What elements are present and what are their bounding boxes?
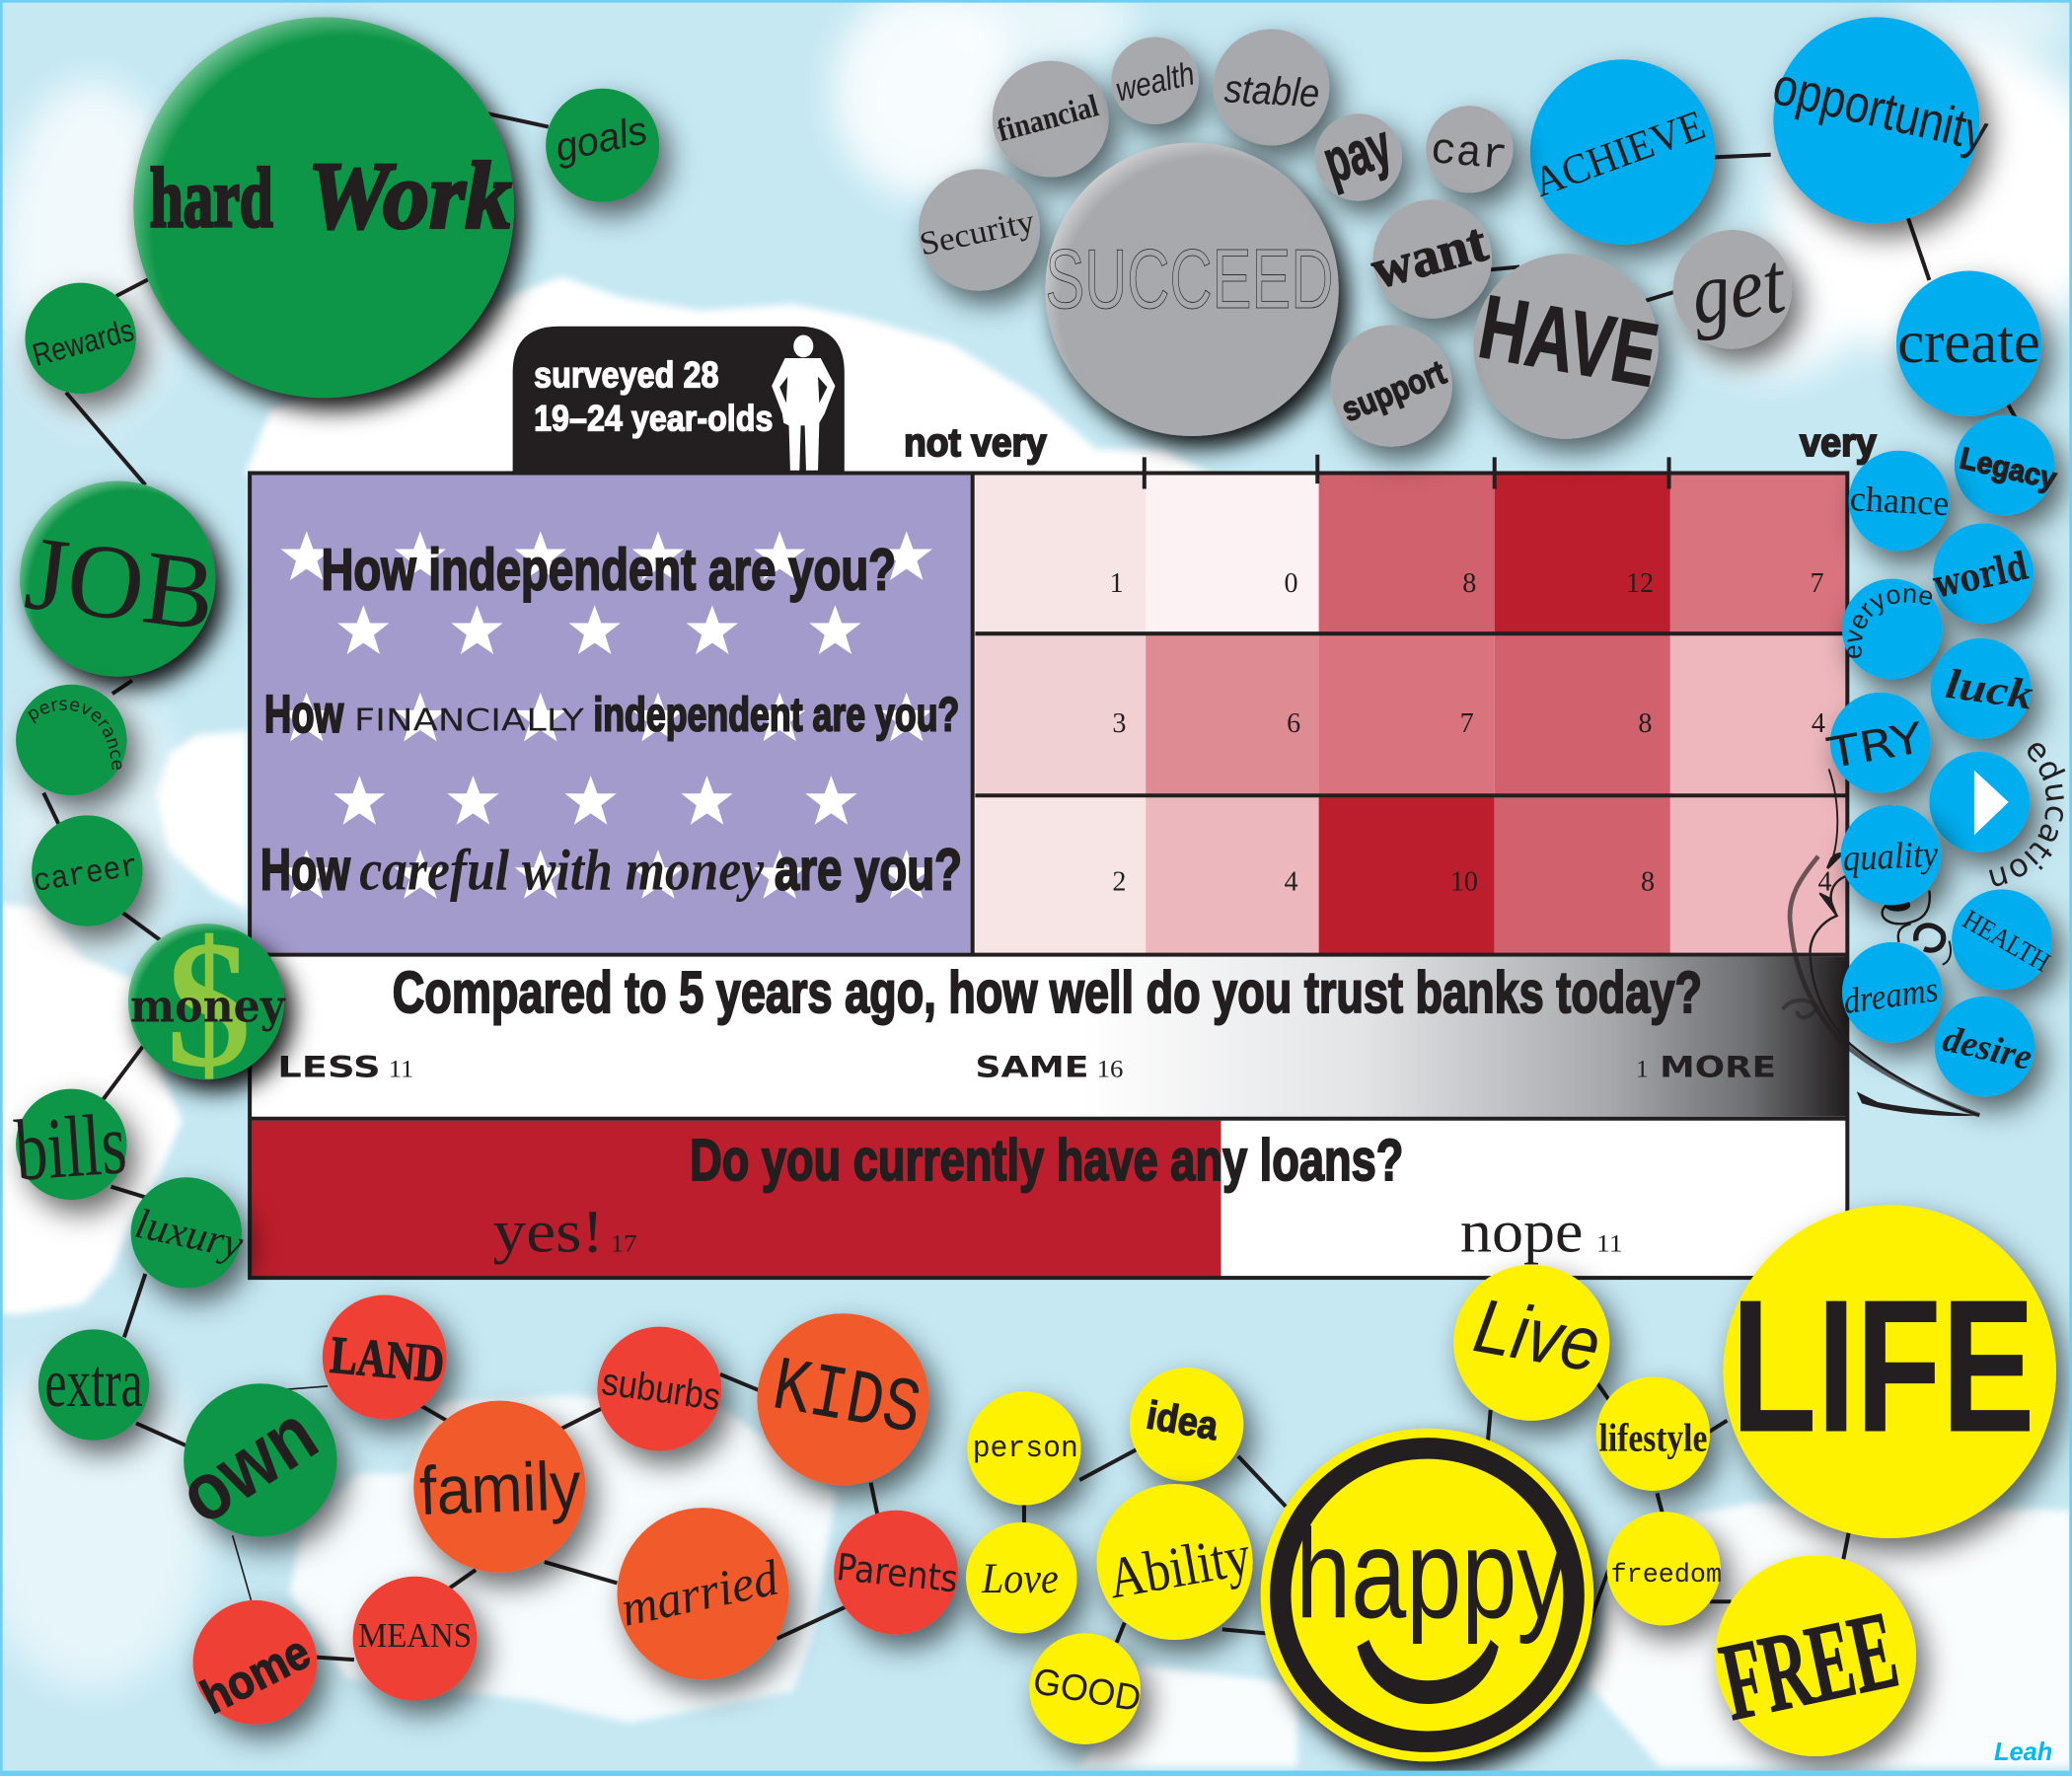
bubble: chance <box>1849 451 1950 551</box>
panel: loans: Do you currently have any loans? <box>690 1129 1403 1193</box>
bubble: person: person <box>973 1432 1078 1466</box>
scale label: not very: not very <box>904 420 1047 465</box>
bubble: LIFE <box>1723 1205 2056 1538</box>
panel: question list: independent are you? <box>593 689 959 742</box>
bubble: KIDS <box>757 1313 929 1485</box>
bubble: lifestyle <box>1596 1377 1710 1491</box>
panel: loans <box>251 1121 1846 1277</box>
panel: trust in banks: 11 <box>389 1055 413 1083</box>
bubble: dreams: dreams <box>1841 969 1941 1021</box>
bubble: Live <box>1453 1265 1609 1421</box>
panel: question list: careful with money <box>359 837 765 902</box>
bubble: car <box>1426 106 1513 193</box>
ornament: black swirl <box>1783 769 1979 1116</box>
bubble: play button with education label <box>1920 743 2066 886</box>
bubble: goals: goals <box>552 108 651 171</box>
bubble: world: world <box>1929 545 2033 608</box>
bubble: JOB: JOB <box>20 515 221 653</box>
icon: play arrow <box>1974 771 2009 835</box>
bubble: KIDS: KIDS <box>766 1344 926 1455</box>
scale label: very: very <box>1800 420 1877 465</box>
panel: loans: nope <box>1460 1198 1583 1265</box>
bubble: FREE: FREE <box>1711 1589 1907 1744</box>
icon: smile <box>1357 1640 1499 1704</box>
icon: standing person <box>772 335 835 471</box>
bubble: pay: pay <box>1315 111 1399 196</box>
panel: question list: are you? <box>775 838 962 902</box>
bubble: financial <box>993 61 1109 177</box>
bubble: world <box>1929 523 2034 624</box>
bubble: extra <box>38 1329 149 1441</box>
panel: trust in banks <box>251 957 1846 1117</box>
bubble: FREE <box>1711 1555 1916 1756</box>
bubble: quality: quality <box>1842 834 1939 879</box>
bubble: luxury: luxury <box>131 1201 248 1269</box>
bubble: Ability <box>1097 1484 1256 1640</box>
bubble: LAND <box>323 1295 447 1419</box>
bubble: hard Work <box>133 17 514 398</box>
bubble: desire: desire <box>1939 1019 2035 1078</box>
survey badge: 19–24 year-olds <box>534 398 773 439</box>
bubble: desire <box>1935 997 2035 1097</box>
bubble: MEANS <box>353 1577 477 1701</box>
bubble: Parents <box>834 1511 960 1635</box>
bubble: TRY: TRY <box>1823 713 1928 779</box>
bubble: luck: luck <box>1943 661 2036 719</box>
bubble: hard Work: Work <box>308 142 511 248</box>
heat table: 0 <box>1284 568 1298 599</box>
bubble: money: $ <box>167 902 251 1104</box>
panel: trust in banks: MORE <box>1660 1051 1776 1084</box>
heat table: 3 <box>1112 708 1126 739</box>
bubble: money <box>128 902 286 1104</box>
bubble: luxury <box>131 1177 248 1289</box>
bubble: wealth <box>1111 37 1199 124</box>
bubble: support: support <box>1336 353 1451 429</box>
panel: trust in banks: LESS <box>277 1051 381 1084</box>
bubble: career: career <box>31 849 141 901</box>
panel: trust in banks: SAME <box>975 1051 1089 1084</box>
panel: loans: yes! <box>493 1198 604 1265</box>
bubble: stable: stable <box>1223 66 1320 115</box>
bubble: married <box>617 1508 789 1679</box>
bubble: wealth: wealth <box>1113 55 1198 110</box>
bubble: Love: Love <box>981 1556 1059 1602</box>
bubble: TRY <box>1823 693 1931 793</box>
heat table: 4 <box>1812 708 1825 739</box>
heat table: 6 <box>1287 708 1300 739</box>
bubble: everyone <box>1831 572 1970 708</box>
bubble: support <box>1331 325 1452 447</box>
panel: question list: How <box>264 686 343 744</box>
heat table: 8 <box>1638 708 1652 739</box>
panel: question list: FINANCIALLY <box>354 703 584 739</box>
heat table: 2 <box>1112 867 1126 898</box>
bubble: home: home <box>193 1625 319 1725</box>
survey panel <box>250 455 1847 1278</box>
bubble: idea <box>1130 1368 1243 1481</box>
bubble: Rewards: Rewards <box>29 312 137 373</box>
panel: trust in banks: 1 <box>1636 1055 1649 1083</box>
bubble: create <box>1896 271 2041 416</box>
bubble: lifestyle: lifestyle <box>1599 1416 1707 1460</box>
bubble: bills: bills <box>12 1095 129 1200</box>
bubble: hard Work: hard <box>150 151 273 245</box>
credit: Leah: Leah <box>1994 1739 2052 1766</box>
bubble: chance: chance <box>1849 479 1950 523</box>
bubble: want: want <box>1366 212 1494 301</box>
bubble: opportunity: opportunity <box>1767 57 1993 163</box>
bubble: suburbs <box>597 1327 723 1451</box>
bubble: suburbs: suburbs <box>599 1361 723 1419</box>
panel: trust in banks: Compared to 5 years ago, how well do you trust banks today? <box>393 961 1702 1025</box>
bubble: everyone: everyone <box>1847 588 1932 658</box>
bubble: ACHIEVE: ACHIEVE <box>1527 102 1711 206</box>
bubble: money: money <box>130 979 286 1032</box>
bubble: perseverance: perseverance <box>28 701 122 770</box>
bubble: Legacy: Legacy <box>1957 440 2060 496</box>
bubble: GOOD: GOOD <box>1030 1660 1145 1719</box>
bubble: married: married <box>617 1550 783 1638</box>
panel: question list: How independent are you? <box>321 538 896 602</box>
heat table <box>975 475 1846 954</box>
bubble: SUCCEED <box>1045 143 1339 436</box>
bubble: HAVE <box>1472 254 1665 439</box>
bubble: family: family <box>418 1446 582 1529</box>
bubble: car: car <box>1429 126 1510 183</box>
bubble: financial: financial <box>994 87 1102 148</box>
bubble: opportunity <box>1767 17 1993 223</box>
heat table: 4 <box>1818 867 1832 898</box>
heat table: 10 <box>1450 867 1478 898</box>
bubble: SUCCEED: SUCCEED <box>1045 232 1333 327</box>
bubble: goals <box>546 89 659 202</box>
bubble: Parents: Parents <box>835 1545 960 1601</box>
heat table: 8 <box>1641 867 1655 898</box>
bubble: quality <box>1841 805 1941 905</box>
survey badge <box>513 327 845 473</box>
bubble: happy smiley: happy <box>1295 1504 1567 1645</box>
bubble: HEALTH <box>1952 889 2055 990</box>
panel: trust in banks: 16 <box>1097 1055 1123 1083</box>
bubble: Security: Security <box>917 203 1038 263</box>
bubble: idea: idea <box>1144 1392 1221 1448</box>
bubble: create: create <box>1897 309 2040 376</box>
bubble: Security <box>917 169 1040 291</box>
bubble: extra: extra <box>45 1346 143 1422</box>
bubble: luck <box>1931 638 2036 739</box>
bubble: LAND: LAND <box>329 1325 447 1394</box>
bubble: own: own <box>163 1387 333 1542</box>
bubble: pay <box>1315 111 1402 201</box>
heat table: 1 <box>1110 568 1124 599</box>
survey badge: surveyed 28 <box>534 353 719 395</box>
bubble: HEALTH: HEALTH <box>1958 905 2055 979</box>
bubble: get: get <box>1685 234 1792 343</box>
panel: loans: 17 <box>611 1228 637 1257</box>
bubble: MEANS: MEANS <box>358 1616 472 1655</box>
heat table: 7 <box>1810 568 1824 599</box>
bubble: happy smiley <box>1261 1429 1593 1761</box>
bubble: Love <box>966 1522 1077 1633</box>
bubble: ACHIEVE <box>1527 59 1715 245</box>
panel: loans: 11 <box>1596 1228 1623 1257</box>
bubble: freedom: freedom <box>1611 1561 1722 1591</box>
heat table: 7 <box>1460 708 1474 739</box>
bubble: Rewards <box>25 283 137 394</box>
bubble: freedom <box>1607 1512 1722 1625</box>
panel: question list: How <box>260 838 350 902</box>
bubble: HAVE: HAVE <box>1472 277 1665 407</box>
heat table: 4 <box>1284 867 1298 898</box>
bubble: Ability: Ability <box>1103 1521 1256 1611</box>
panel: question list <box>251 475 973 953</box>
bubble: stable <box>1213 29 1329 145</box>
bubble: perseverance <box>5 679 156 825</box>
bubble: Live: Live <box>1468 1283 1606 1388</box>
heat table: 12 <box>1626 568 1654 599</box>
bubble: career <box>31 815 143 926</box>
bubble: family <box>413 1401 585 1573</box>
heat table: 8 <box>1462 568 1476 599</box>
bubble: Legacy <box>1955 415 2060 515</box>
bubble: person <box>967 1391 1081 1505</box>
bubble: dreams <box>1841 942 1943 1043</box>
bubble: GOOD <box>1029 1633 1145 1744</box>
